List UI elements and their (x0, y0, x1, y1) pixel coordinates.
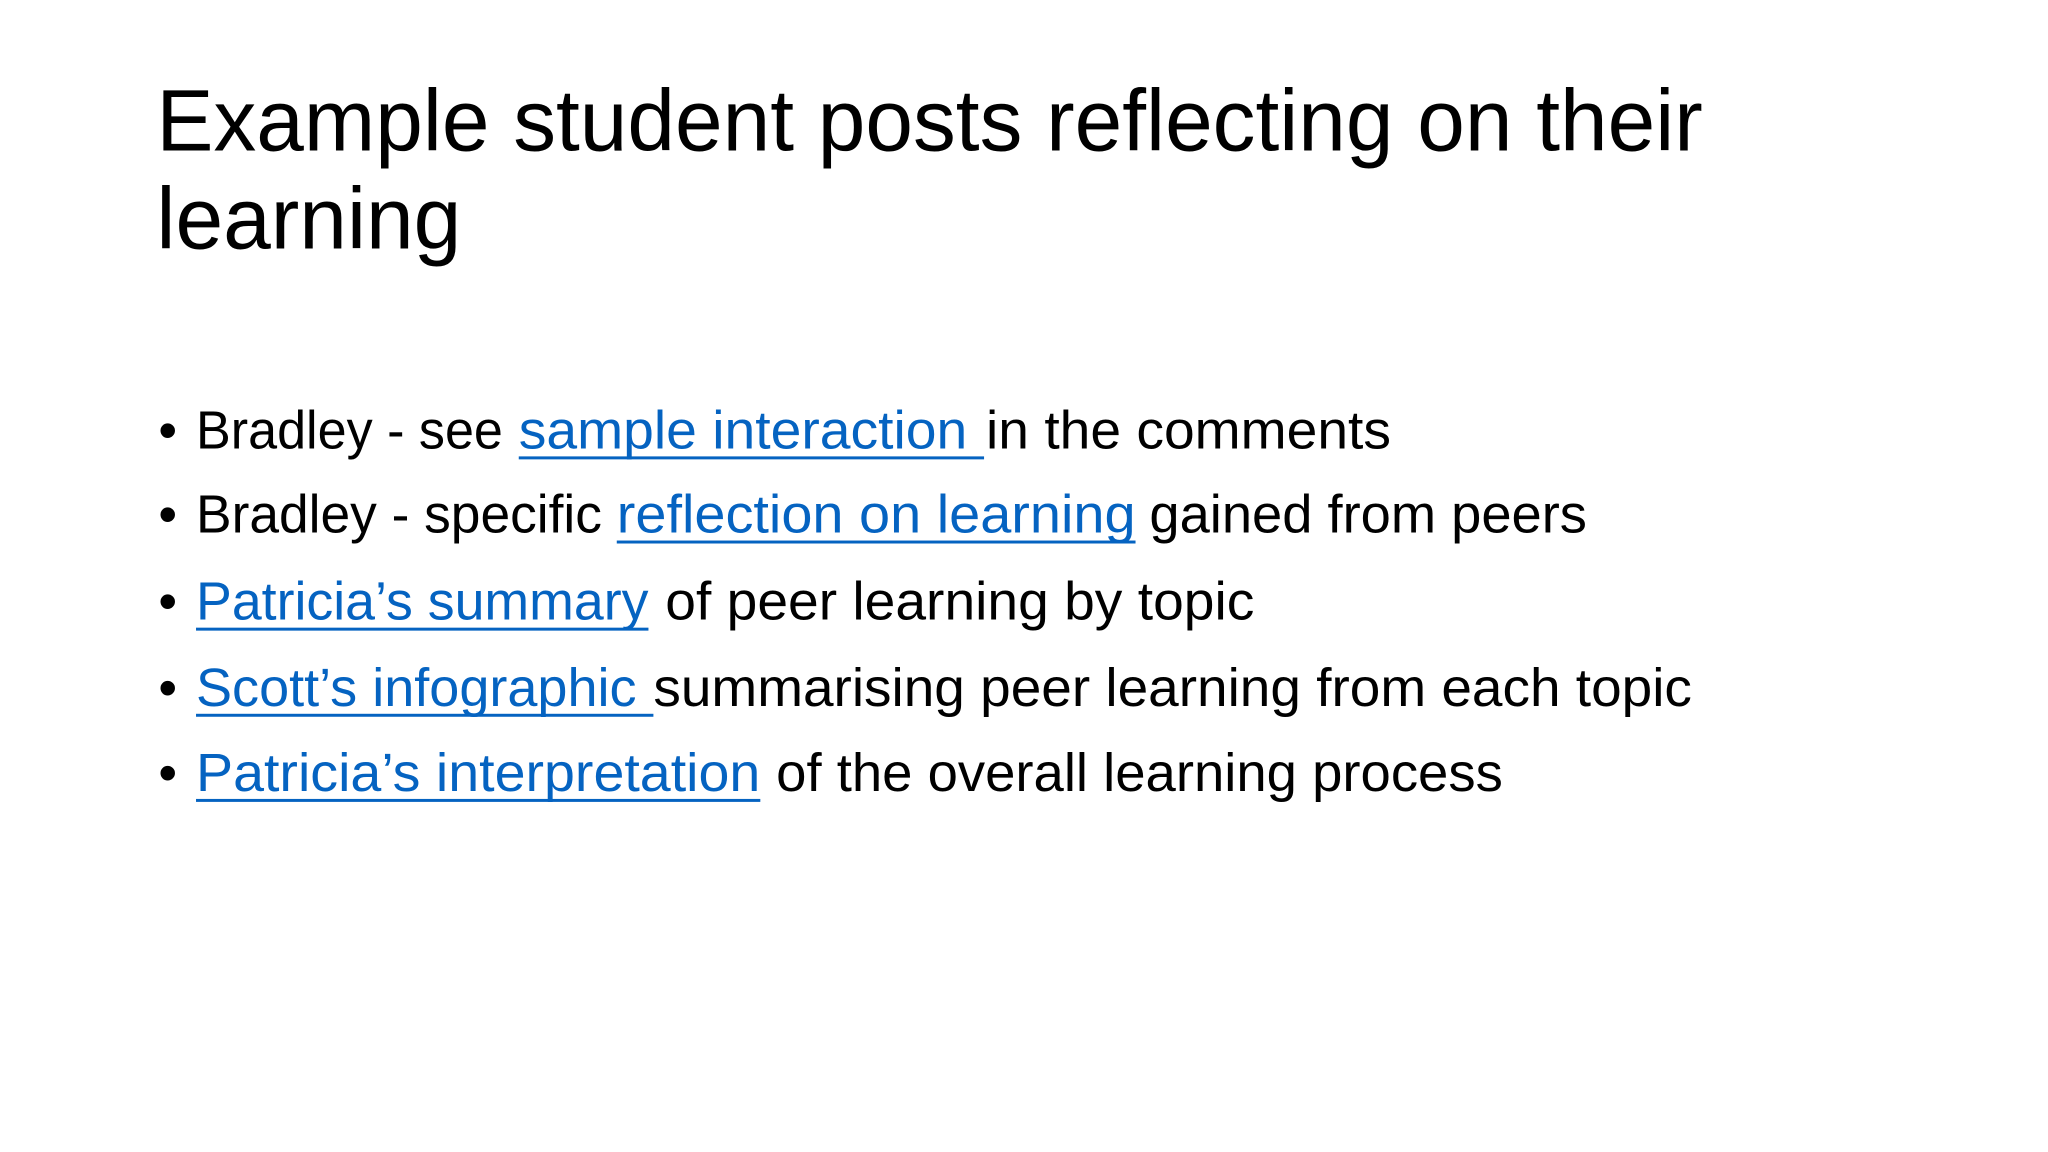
bullet 3: Patricia’s summary (196, 573, 649, 632)
bullet 5: of the overall learning process (776, 744, 1503, 803)
bullet 1: in the comments (986, 401, 1391, 460)
bullet 1: sample interaction (519, 401, 967, 460)
bullet 2 (158, 486, 1587, 545)
bullet 3 (158, 573, 1254, 632)
bullet 1 (158, 401, 1391, 460)
title: Example student posts reflecting on their (156, 72, 1703, 169)
bullet 2: reflection on learning (617, 486, 1136, 545)
bullet 2: gained from peers (1149, 486, 1587, 545)
slide content (156, 72, 1703, 803)
bullet 5: • (158, 744, 177, 803)
bullet 5: Patricia’s interpretation (196, 744, 760, 803)
bullet 4: summarising peer learning from each topic (653, 659, 1692, 718)
bullet 4: Scott’s infographic (196, 659, 637, 718)
title (156, 72, 1703, 267)
bullet 4 (158, 659, 1692, 718)
bullet list (158, 401, 1692, 803)
bullet 5 (158, 744, 1503, 803)
title: learning (156, 170, 461, 267)
bullet 2: Bradley - specific (196, 486, 602, 545)
bullet 1: Bradley - see (196, 401, 503, 460)
bullet 2: • (158, 486, 177, 545)
bullet 1: • (158, 401, 177, 460)
bullet 3: • (158, 573, 177, 632)
bullet 4: • (158, 659, 177, 718)
bullet 3: of peer learning by topic (665, 573, 1254, 632)
